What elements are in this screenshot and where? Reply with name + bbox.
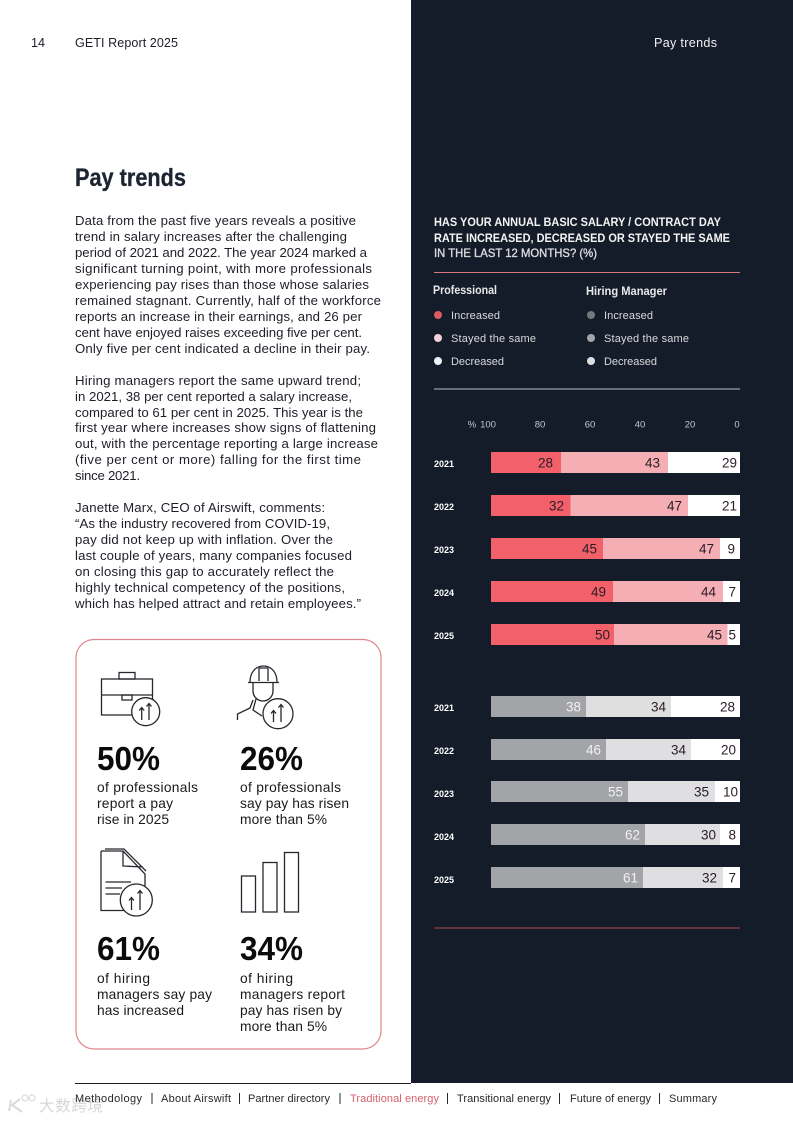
- stat: 34 per cent: more than 5%: [240, 1019, 327, 1034]
- text block: CEO quote: [74, 500, 361, 611]
- bar: professional 2021: 29: [722, 456, 737, 470]
- text block: CEO quote: which has helped attract and retain employees.”: [74, 596, 361, 611]
- text block: CEO quote: on closing this gap to accurately reflect the: [75, 564, 334, 579]
- stat: 34 per cent: pay has risen by: [240, 1003, 342, 1018]
- stat: 50 per cent: of professionals: [97, 780, 198, 795]
- chart axis: 80: [535, 420, 545, 430]
- bar: professional 2022: 47: [667, 498, 682, 514]
- text block: five-year trend: Data from the past five years reveals a positive: [75, 213, 356, 228]
- footer navigation: About Airswift: [161, 1093, 231, 1105]
- text block: CEO quote: pay did not keep up with inflation. Over the: [75, 532, 333, 547]
- bar: professional 2024: 44: [701, 584, 716, 600]
- bar: professional 2022: 2022: [434, 502, 454, 512]
- text block: CEO quote: Janette Marx, CEO of Airswift, comments:: [75, 500, 325, 515]
- bar: professional 2023: 47: [699, 542, 714, 556]
- bar: professional 2023: 45: [582, 542, 597, 556]
- bar: hiring manager 2025: 32: [702, 870, 717, 886]
- bar: hiring manager 2025: 61: [623, 870, 638, 886]
- stat: 61 per cent: 61%: [97, 930, 160, 967]
- bar: hiring manager 2022: 46: [586, 742, 601, 758]
- stat: 26 per cent: [240, 740, 349, 827]
- stat: 34 per cent: of hiring: [240, 971, 293, 986]
- chart title: HAS YOUR ANNUAL BASIC SALARY / CONTRACT DAY: [434, 215, 721, 229]
- stat: 50 per cent: [97, 740, 198, 827]
- bar: professional 2022: 21: [722, 498, 737, 514]
- bar: hiring manager 2023: [434, 781, 740, 802]
- footer navigation: Future of energy: [570, 1093, 652, 1105]
- bar: professional 2025: 5: [728, 628, 736, 642]
- text block: CEO quote: “As the industry recovered from COVID-19,: [75, 516, 330, 531]
- bar: professional 2021: 28: [538, 456, 553, 470]
- bar: hiring manager 2023: 35: [694, 784, 709, 800]
- text block: hiring managers: (five per cent or more) falling for the first time: [75, 452, 361, 467]
- text block: five-year trend: trend in salary increases after the challenging: [75, 229, 347, 244]
- text block: five-year trend: significant turning point, with more professionals: [75, 261, 372, 276]
- stat: 50 per cent: rise in 2025: [97, 812, 169, 827]
- bar: hiring manager 2021: 34: [651, 700, 666, 714]
- icon: briefcase with up arrows: [102, 672, 160, 726]
- page header left: GETI Report 2025: [75, 36, 178, 50]
- text block: CEO quote: last couple of years, many companies focused: [75, 548, 352, 563]
- chart axis: 40: [635, 420, 645, 430]
- bar: professional 2021: 2021: [434, 459, 454, 469]
- bar: professional 2023: 9: [727, 542, 735, 556]
- bar: professional 2022: [434, 495, 740, 516]
- legend: professional: [433, 283, 536, 368]
- bar: hiring manager 2024: 62: [625, 828, 640, 842]
- stat: 50 per cent: report a pay: [97, 796, 173, 811]
- bar: professional 2023: [434, 538, 740, 559]
- bar: hiring manager 2023: 2023: [434, 789, 454, 799]
- bar: hiring manager 2024: 30: [701, 828, 716, 842]
- bar: hiring manager 2024: 2024: [434, 832, 454, 842]
- text block: five-year trend: remained stagnant. Currently, half of the workforce: [75, 293, 381, 308]
- bar: hiring manager 2024: 8: [728, 828, 736, 842]
- bar: hiring manager 2021: 38: [566, 700, 581, 714]
- bar: hiring manager 2023: 55: [608, 784, 623, 800]
- bar: professional 2021: [434, 452, 740, 473]
- bar: hiring manager 2024: [434, 824, 740, 845]
- bar: hiring manager 2023: 10: [723, 784, 738, 800]
- bar: professional 2025: 50: [595, 628, 610, 642]
- bar: professional 2025: 45: [707, 628, 722, 642]
- legend: professional: Increased: [451, 310, 500, 322]
- footer navigation: Partner directory: [248, 1093, 330, 1105]
- chart title: [434, 215, 730, 260]
- chart axis: 60: [585, 420, 595, 430]
- footer navigation: Transitional energy: [457, 1093, 552, 1105]
- bar: professional 2024: 7: [728, 584, 736, 600]
- chart axis: 0: [734, 420, 740, 430]
- stat: 26 per cent: of professionals: [240, 780, 341, 795]
- legend: hiring manager: Decreased: [604, 356, 657, 368]
- footer navigation: Summary: [669, 1093, 718, 1105]
- text block: hiring managers: [75, 373, 378, 483]
- text block: five-year trend: reports an increase in their earnings, and 26 per: [75, 309, 363, 324]
- legend: hiring manager: Hiring Manager: [586, 284, 667, 298]
- text block: five-year trend: [75, 213, 381, 356]
- legend: professional: Professional: [433, 283, 497, 297]
- bar: hiring manager 2021: [434, 696, 740, 717]
- footer navigation: Traditional energy: [350, 1093, 440, 1105]
- text block: five-year trend: experiencing pay rises than those whose salaries: [75, 277, 369, 292]
- text block: hiring managers: in 2021, 38 per cent reported a salary increase,: [75, 389, 352, 404]
- bar: hiring manager 2025: 7: [728, 870, 736, 886]
- icon: rising bars: [242, 852, 298, 912]
- stat: 61 per cent: managers say pay: [97, 987, 212, 1002]
- bar: professional 2025: [434, 624, 740, 645]
- text block: hiring managers: compared to 61 per cent in 2025. This year is the: [75, 405, 363, 420]
- bar: hiring manager 2021: 2021: [434, 703, 454, 713]
- bar: hiring manager 2022: 20: [721, 742, 736, 758]
- icon: document with up arrows: [101, 849, 152, 916]
- legend: professional: Stayed the same: [451, 333, 536, 345]
- chart title: RATE INCREASED, DECREASED OR STAYED THE SAME: [434, 231, 730, 245]
- heading: pay trends: Pay trends: [75, 164, 186, 192]
- bar: professional 2021: 43: [645, 456, 660, 470]
- text block: five-year trend: period of 2021 and 2022. The year 2024 marked a: [75, 245, 368, 260]
- bar: hiring manager 2025: 2025: [434, 875, 454, 885]
- stat: 34 per cent: 34%: [240, 930, 303, 967]
- bar: professional 2022: 32: [549, 498, 564, 514]
- stat: 34 per cent: [240, 930, 345, 1034]
- panel: key statistics card: [76, 640, 381, 1049]
- bar: professional 2024: 49: [591, 584, 606, 600]
- bar chart: professional: [434, 452, 740, 645]
- watermark: 大数跨境: [39, 1096, 103, 1115]
- chart axis: 20: [685, 420, 695, 430]
- legend: hiring manager: Stayed the same: [604, 333, 689, 345]
- bar: professional 2024: [434, 581, 740, 602]
- chart axis: %: [468, 420, 477, 430]
- page header right: Pay trends: [654, 36, 717, 50]
- legend: hiring manager: [586, 284, 689, 368]
- stat: 26 per cent: more than 5%: [240, 812, 327, 827]
- bar: hiring manager 2025: [434, 867, 740, 888]
- chart axis: [468, 420, 740, 430]
- stat: 34 per cent: managers report: [240, 987, 345, 1002]
- footer navigation: Methodology: [75, 1093, 142, 1105]
- bar chart: hiring manager: [434, 696, 740, 888]
- text block: five-year trend: cent have enjoyed raises exceeding five per cent.: [75, 325, 362, 340]
- legend: hiring manager: Increased: [604, 310, 653, 322]
- bar: professional 2025: 2025: [434, 631, 454, 641]
- stat: 61 per cent: has increased: [97, 1003, 184, 1018]
- stat: 26 per cent: say pay has risen: [240, 796, 349, 811]
- chart title: IN THE LAST 12 MONTHS? (%): [434, 246, 597, 260]
- text block: five-year trend: Only five per cent indicated a decline in their pay.: [75, 341, 370, 356]
- stat: 61 per cent: of hiring: [97, 971, 150, 986]
- bar: hiring manager 2022: [434, 739, 740, 760]
- stat: 61 per cent: [97, 930, 212, 1018]
- bar: hiring manager 2022: 2022: [434, 746, 454, 756]
- icon: worker with hard hat: [238, 666, 293, 729]
- legend: professional: Decreased: [451, 356, 504, 368]
- text block: hiring managers: first year where increases show signs of flattening: [75, 420, 376, 435]
- stat: 50 per cent: 50%: [97, 740, 160, 777]
- text block: hiring managers: out, with the percentage reporting a large increase: [75, 436, 378, 451]
- bar: hiring manager 2021: 28: [720, 700, 735, 714]
- bar: hiring manager 2022: 34: [671, 742, 686, 758]
- watermark: [9, 1095, 103, 1115]
- footer navigation: [75, 1084, 718, 1105]
- text block: hiring managers: since 2021.: [75, 468, 140, 483]
- bar: professional 2023: 2023: [434, 545, 454, 555]
- text block: CEO quote: highly technical competency of the positions,: [75, 580, 345, 595]
- panel: chart background: [411, 0, 793, 1083]
- page header left: 14: [31, 36, 45, 50]
- bar: professional 2024: 2024: [434, 588, 454, 598]
- stat: 26 per cent: 26%: [240, 740, 303, 777]
- text block: hiring managers: Hiring managers report the same upward trend;: [75, 373, 361, 388]
- chart axis: 100: [480, 420, 496, 430]
